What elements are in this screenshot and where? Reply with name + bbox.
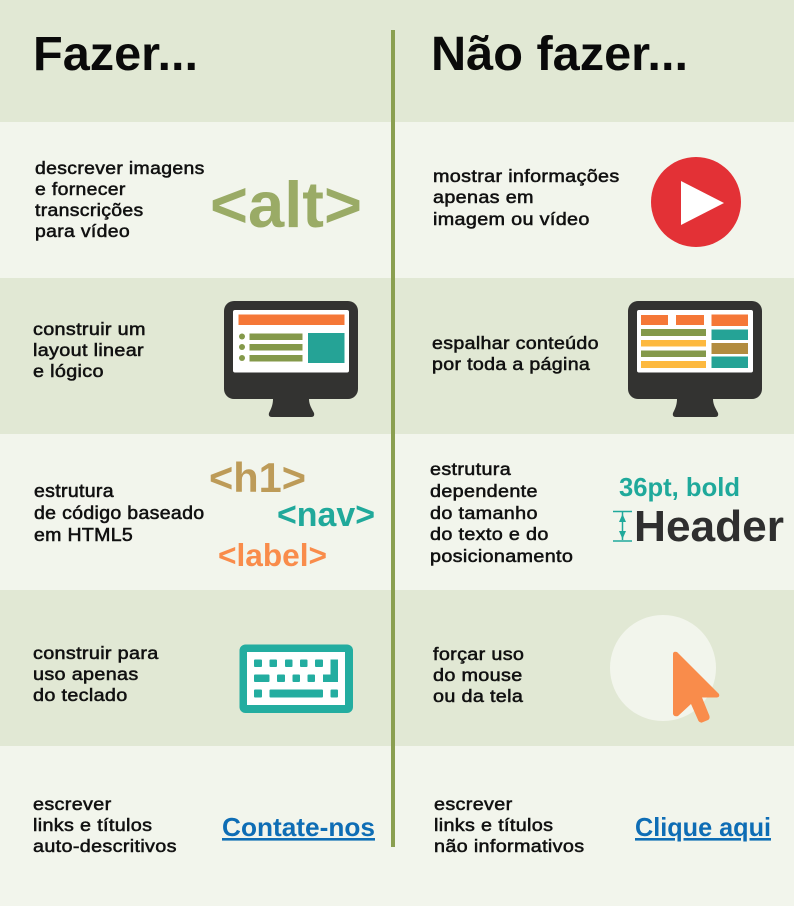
text: estrutura dependente: estrutura [430,460,511,480]
heading: Não fazer: Não fazer... [431,28,688,81]
text: estrutura de código: estrutura [34,481,114,501]
text: forçar uso do mouse: forçar uso [433,645,524,665]
text: escrever links auto-descritivos: links e títulos [33,816,152,836]
heading: Fazer: Fazer... [33,28,198,81]
text: estrutura dependente: do tamanho [430,504,538,524]
text: descrever imagens: e fornecer [35,179,126,199]
text: estrutura de código: em HTML5 [34,525,133,545]
text: forçar uso do mouse: ou da tela [433,687,523,707]
icon: header text size [613,474,784,551]
text: construir um layout: construir um [33,320,146,340]
text: escrever links não informativos: não informativos [434,837,584,857]
icon: header text size: 36pt, bold [619,474,740,502]
text: escrever links auto-descritivos: auto-descritivos [33,837,177,857]
text: construir um layout: layout linear [33,341,144,361]
icon: header text size: Header [634,502,784,551]
icon: monitor with scattered layout [628,301,762,417]
text: estrutura dependente: do texto e do [430,525,549,545]
text: estrutura dependente: dependente [430,482,538,502]
text: escrever links não informativos: escrever [434,795,513,815]
text: escrever links não informativos: links e títulos [434,816,553,836]
text: descrever imagens: descrever imagens [35,158,205,178]
icon: mouse cursor [610,615,719,723]
text: escrever links auto-descritivos: escrever [33,795,112,815]
text: descrever imagens: transcrições [35,200,144,220]
text: construir um layout: e lógico [33,362,104,382]
icon: HTML5 tags: <h1> [209,454,306,501]
icon: monitor with linear layout [224,301,358,417]
text: espalhar conteúdo: espalhar conteúdo [432,333,599,353]
icon: HTML5 tags: <nav> [277,496,375,534]
text: estrutura de código: de código baseado [34,503,204,523]
icon: keyboard [240,644,353,713]
text: mostrar informações: imagem ou vídeo [433,210,590,230]
text: estrutura dependente: posicionamento [430,547,573,567]
text: mostrar informações: mostrar informações [433,167,620,187]
text: mostrar informações: apenas em [433,188,534,208]
icon: video play button [651,157,741,247]
link: Contate-nos: Contate-nos [222,812,375,842]
icon: HTML5 tags [209,454,375,573]
text: descrever imagens: para vídeo [35,221,130,241]
text: espalhar conteúdo: por toda a página [432,354,590,374]
text: construir para teclado: do teclado [33,686,128,706]
text: construir para teclado: construir para [33,644,159,664]
icon: alt tag: <alt> [210,168,362,241]
link: Clique aqui: Clique aqui [635,812,771,842]
text: construir para teclado: uso apenas [33,665,139,685]
text: forçar uso do mouse: do mouse [433,666,523,686]
icon: HTML5 tags: <label> [218,537,327,573]
